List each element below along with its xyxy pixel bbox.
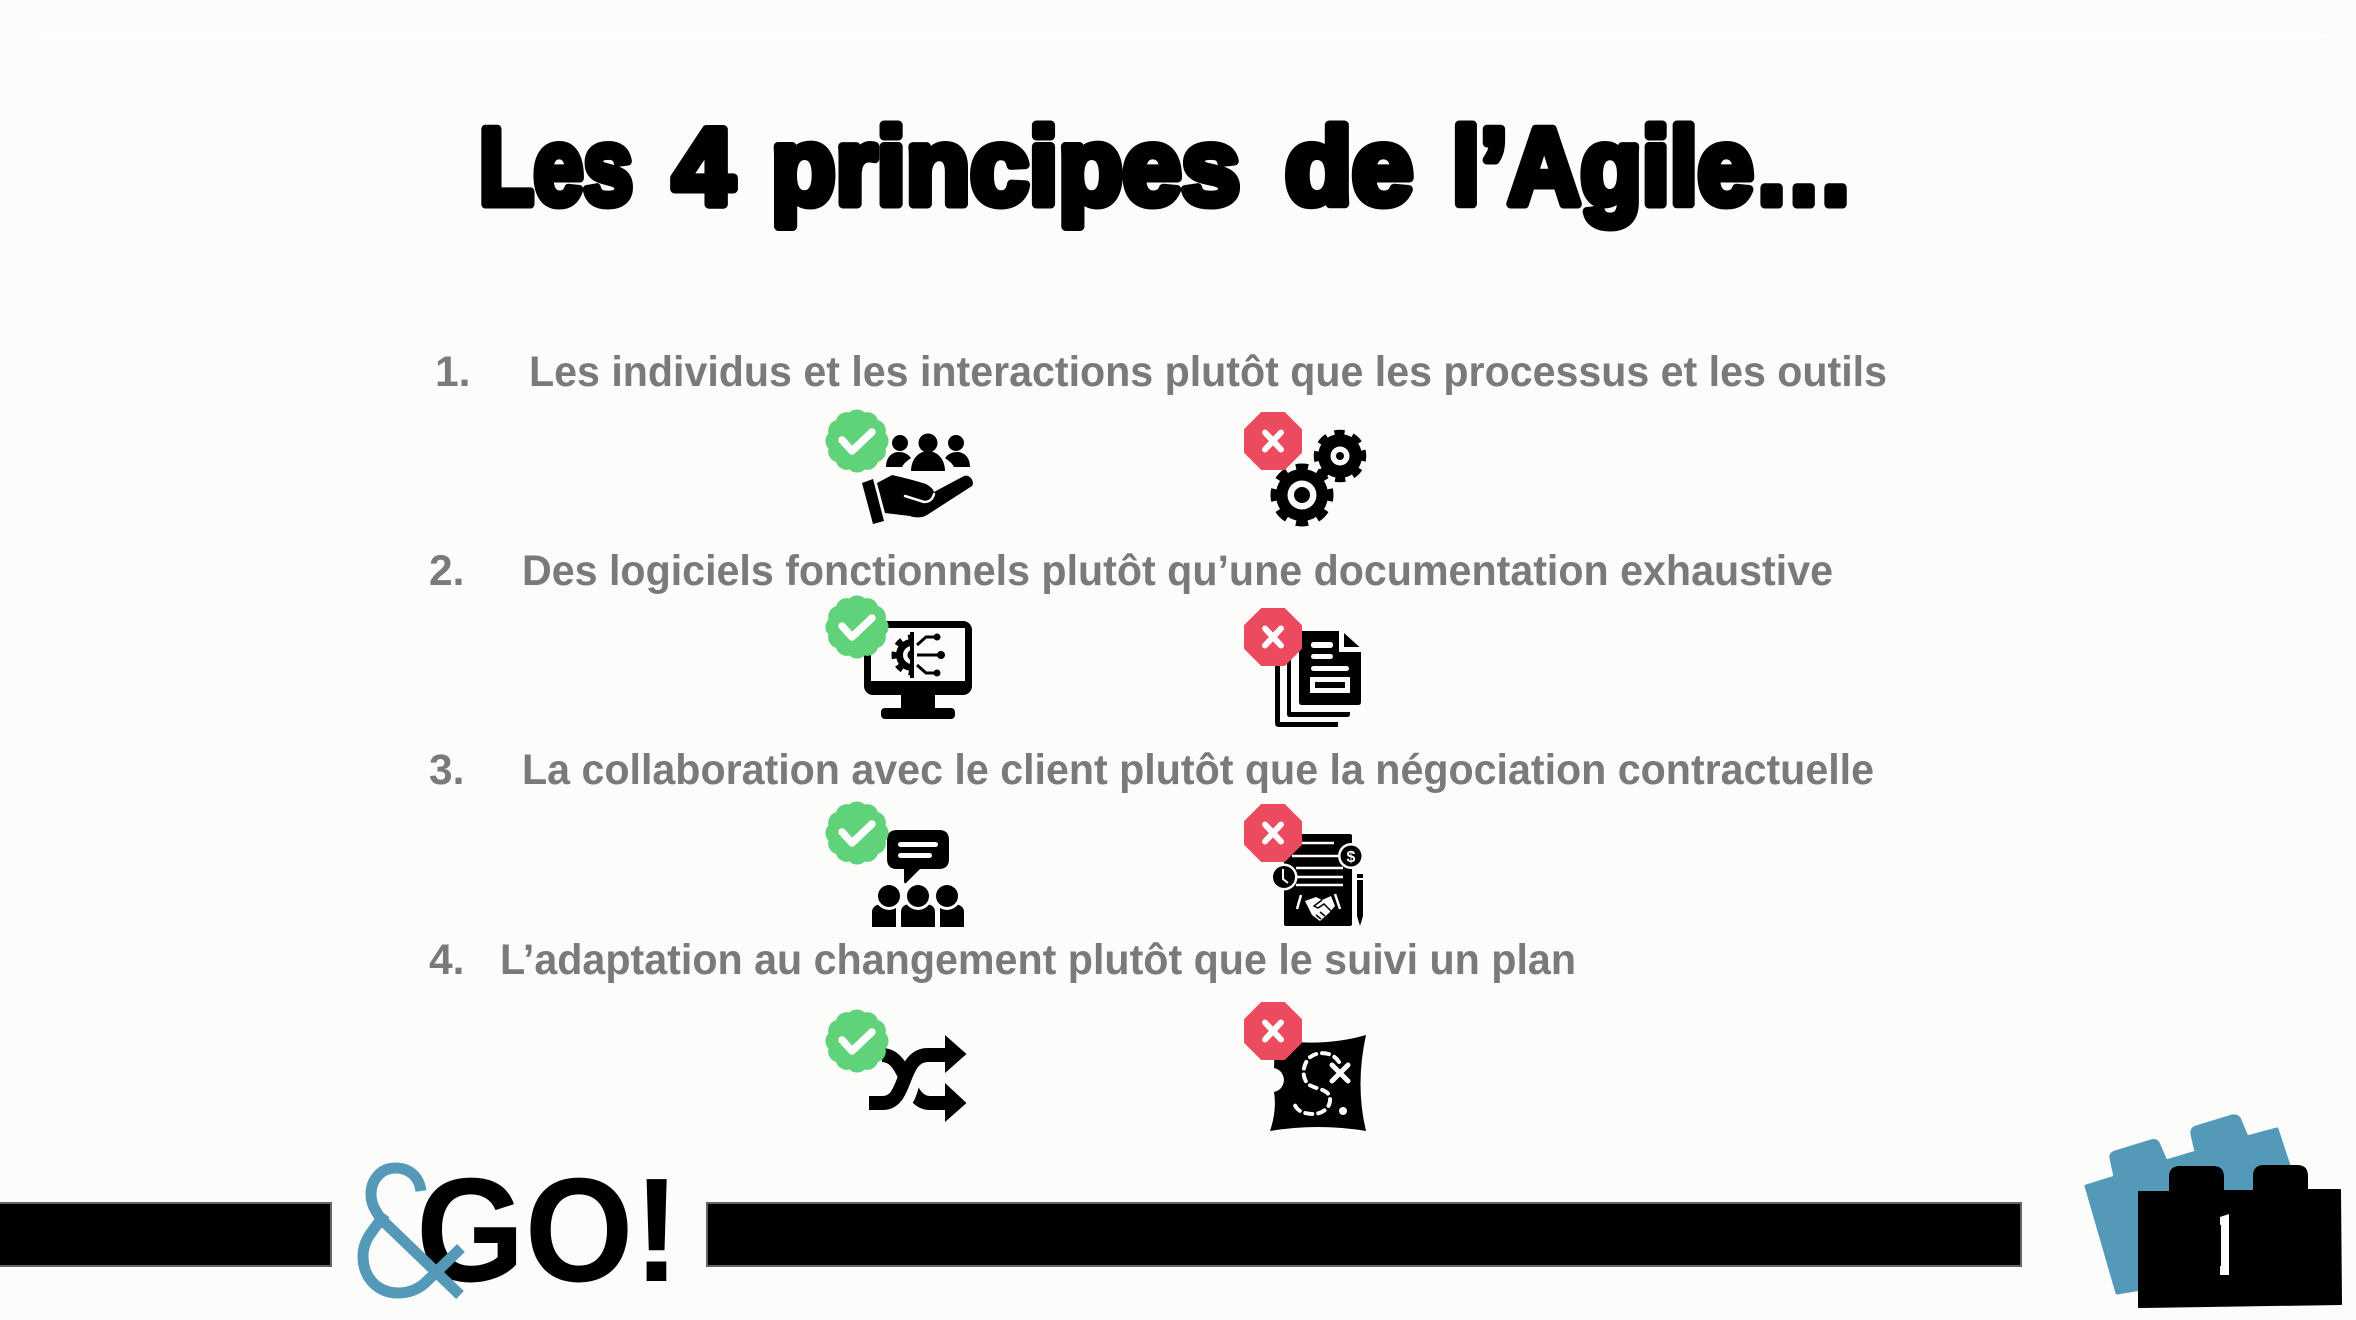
icon: red cross badge 2 xyxy=(1246,610,1300,664)
principle 4 text: 4. xyxy=(429,937,464,984)
number 1: 1 xyxy=(2201,1195,2249,1294)
icon: red cross badge 4 xyxy=(1246,1004,1300,1058)
icon: team with speech bubble xyxy=(872,830,964,927)
principle 1 text: Les individus et les interactions plutôt que les processus et les outils xyxy=(529,349,1887,396)
icon: green check badge 3 xyxy=(825,801,889,865)
blue brick xyxy=(2086,1116,2320,1293)
icon: green check badge 4 xyxy=(825,1009,889,1073)
icon: treasure map xyxy=(1270,1035,1366,1131)
title: Les xyxy=(479,106,633,228)
title: 4 xyxy=(673,106,734,228)
icon: monitor with circuit gear xyxy=(864,621,972,719)
icon: contract with handshake xyxy=(1270,834,1364,926)
icon: gears xyxy=(1274,432,1364,524)
title: de xyxy=(1285,106,1413,228)
black brick xyxy=(2139,1166,2341,1307)
principle 1 text: 1. xyxy=(435,349,470,396)
title: l’Agile… xyxy=(1452,106,1854,228)
icon: red cross badge 3 xyxy=(1246,806,1300,860)
title: principes xyxy=(771,106,1240,228)
icon: green check badge 2 xyxy=(825,595,889,659)
icon: green check badge 1 xyxy=(825,409,889,473)
logo: &GO!: GO! xyxy=(416,1148,680,1313)
title xyxy=(479,106,1854,228)
principle 3 text: 3. xyxy=(429,747,464,794)
logo: lego bricks with number 1 xyxy=(2086,1116,2341,1307)
principle 4 text: L’adaptation au changement plutôt que le suivi un plan xyxy=(500,937,1576,984)
icon: shuffle arrows xyxy=(869,1035,966,1122)
principle 2 text: Des logiciels fonctionnels plutôt qu’une documentation exhaustive xyxy=(522,548,1833,595)
footer bar left xyxy=(0,1203,331,1266)
principle 3 text: La collaboration avec le client plutôt que la négociation contractuelle xyxy=(522,747,1874,794)
principle 2 text: 2. xyxy=(429,548,464,595)
icon: contract with handshake: $ xyxy=(1347,849,1356,866)
icon: stacked documents xyxy=(1275,631,1361,727)
icon: red cross badge 1 xyxy=(1246,414,1300,468)
footer bar right xyxy=(707,1203,2021,1266)
icon: people in a caring hand xyxy=(862,434,973,524)
